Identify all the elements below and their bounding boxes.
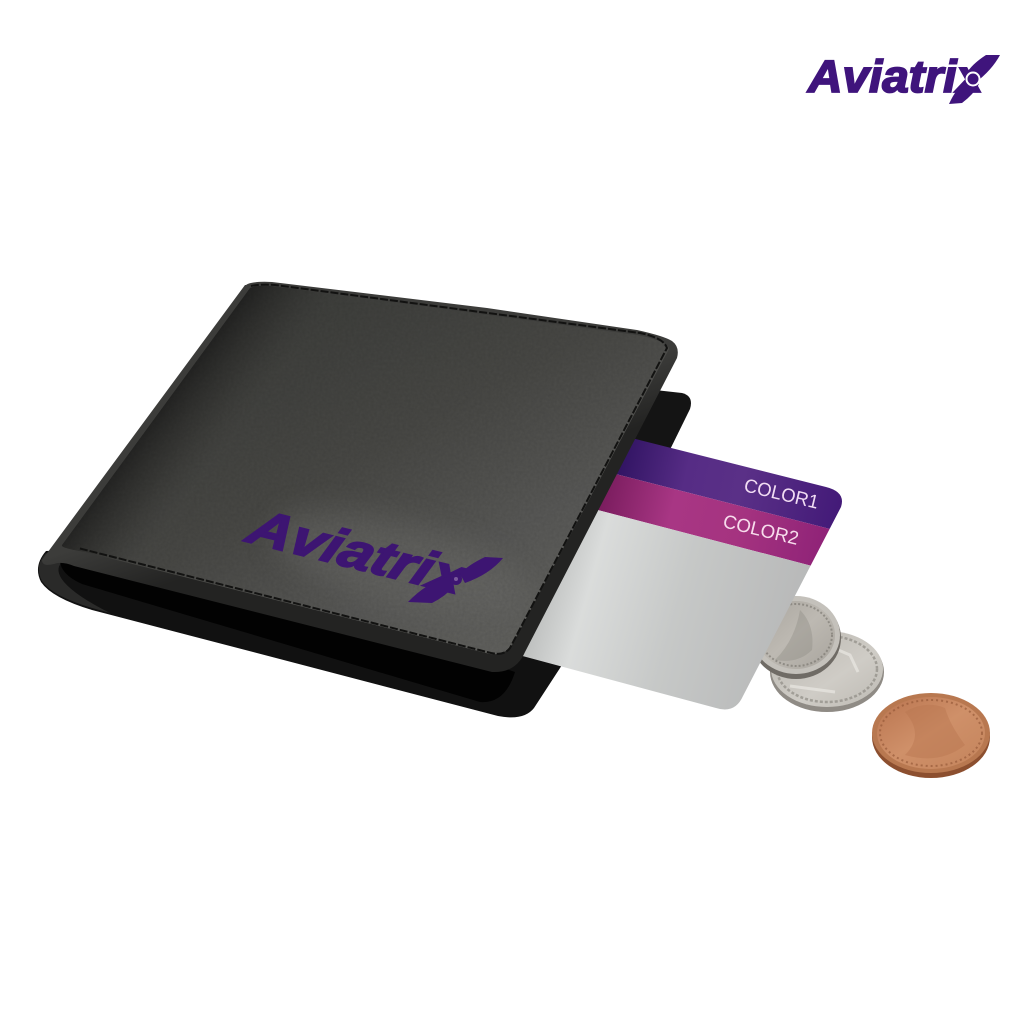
lower silver coin [770, 631, 884, 712]
wallet front flap [40, 280, 680, 680]
card colour stripe 1 [616, 439, 842, 529]
card label: color 2: COLOR2 [721, 511, 801, 550]
card silver body [522, 510, 810, 710]
card label: color 1: COLOR1 [742, 475, 821, 514]
wallet rear layer and lower body [38, 390, 691, 717]
wallet lower body [38, 550, 600, 717]
embossed wallet logo [237, 498, 503, 605]
wallet logo propeller [408, 557, 503, 603]
upper silver coin [751, 596, 841, 679]
copper penny [872, 693, 990, 778]
top-right brand logo [807, 51, 1000, 104]
access card [522, 439, 842, 710]
logo propeller icon [949, 55, 1000, 104]
wallet pocket interior [60, 560, 515, 702]
leather grain [40, 280, 680, 680]
wallet fold highlight [39, 553, 110, 613]
card colour stripe 2 [590, 470, 830, 566]
stitching [78, 285, 667, 654]
lower leather highlight [284, 514, 478, 592]
wallet logo wordmark: Aviatrix [237, 498, 479, 605]
product illustration scene [38, 55, 1000, 778]
logo wordmark: Aviatrix [807, 51, 985, 102]
leather shading [62, 286, 455, 590]
flap outer edge [42, 282, 678, 672]
flap leather face [62, 286, 669, 654]
coins [751, 596, 990, 778]
wallet rear tab [620, 390, 691, 470]
left edge shadow [62, 286, 294, 557]
